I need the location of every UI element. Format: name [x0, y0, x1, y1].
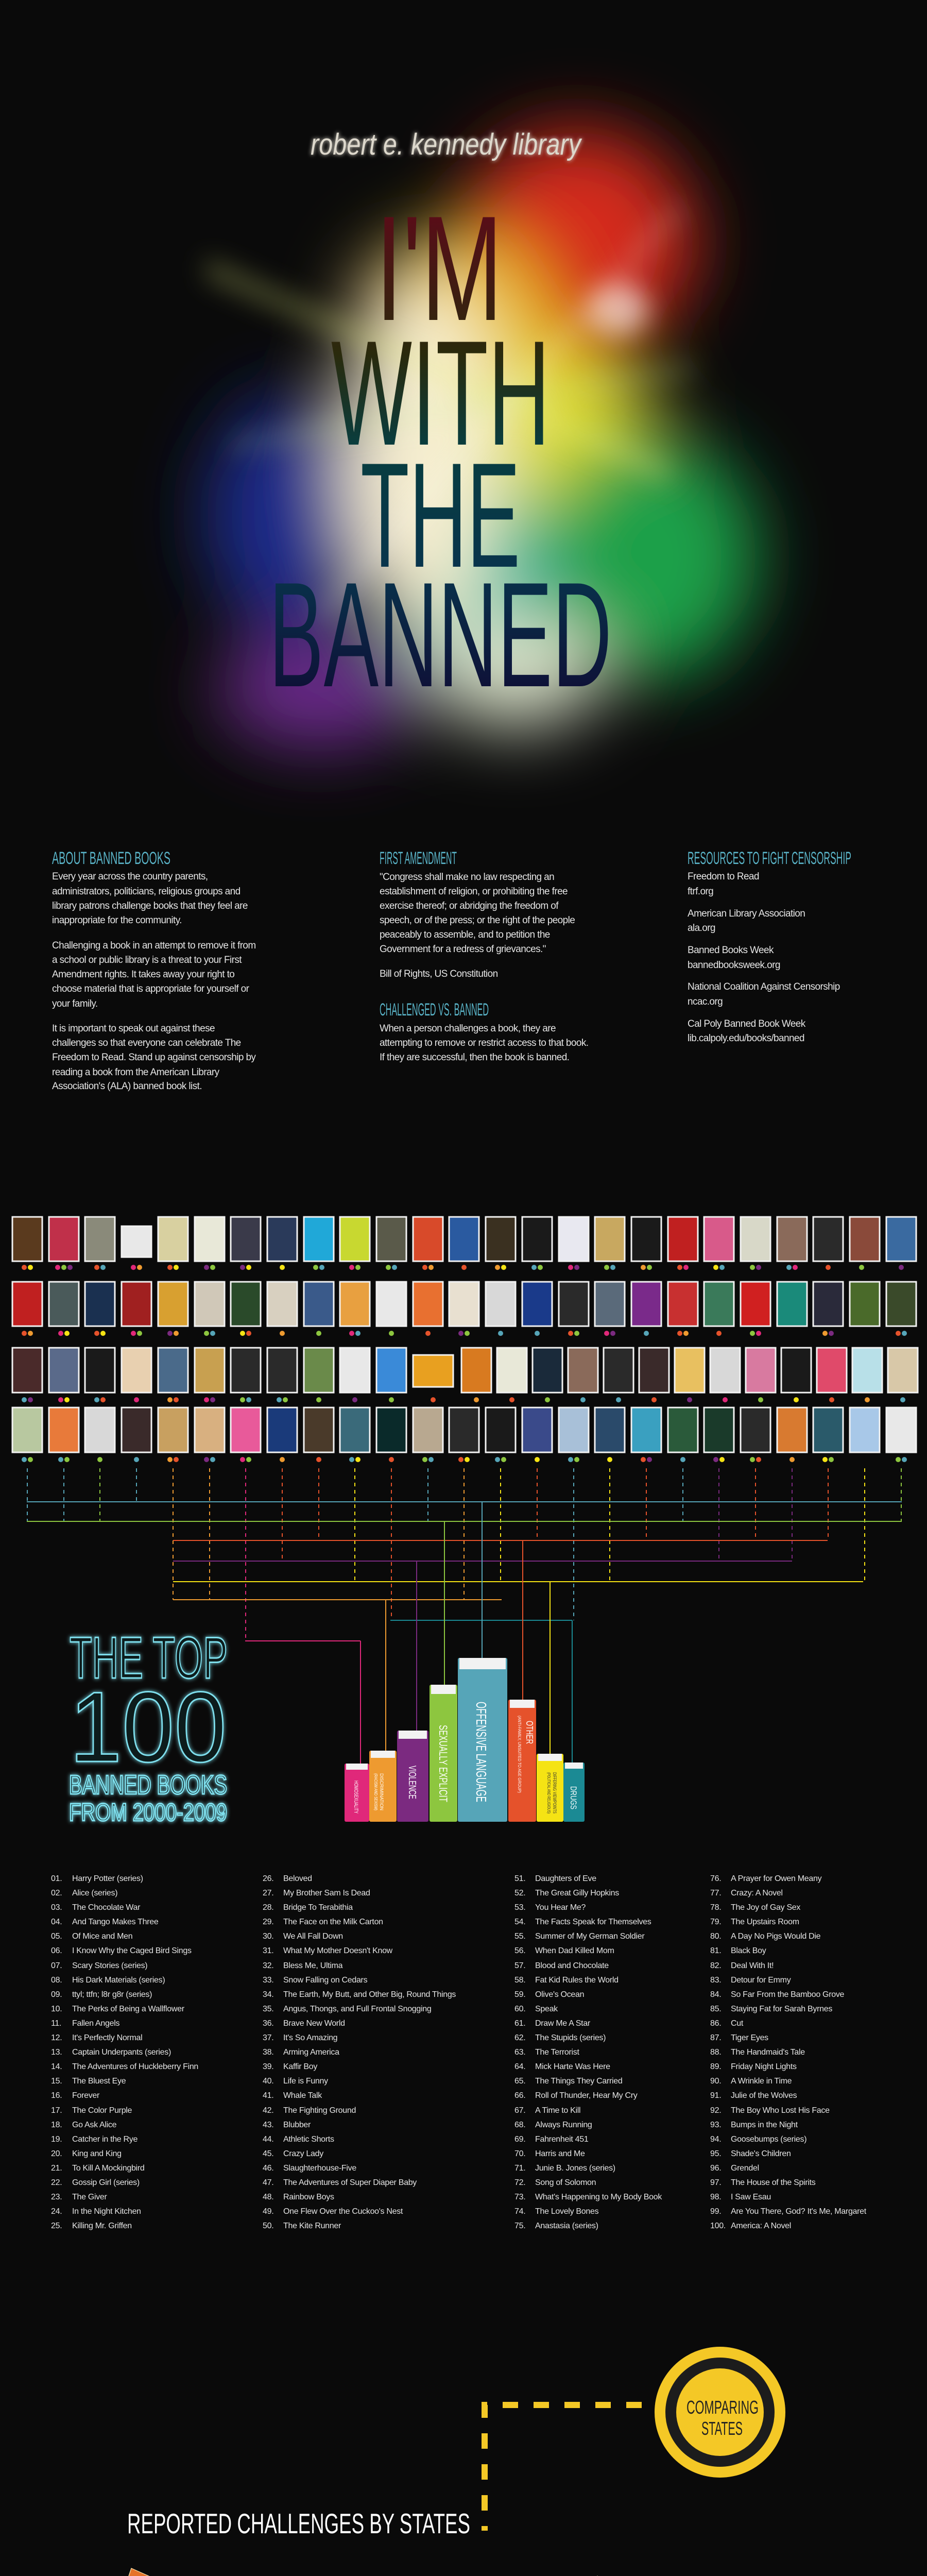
- list: top 100 banned books: 10.: [51, 2005, 62, 2013]
- list: top 100 banned books: The Terrorist: [535, 2048, 579, 2057]
- list: top 100 banned books: Detour for Emmy: [731, 1976, 791, 1985]
- panel: about banned books: your family.: [52, 998, 98, 1009]
- heading: the top 100 banned books from 2000-2009: FROM 2000-2009: [69, 1799, 227, 1826]
- list: top 100 banned books: Crazy: A Novel: [731, 1889, 783, 1897]
- list: top 100 banned books: 60.: [514, 2005, 525, 2013]
- chart: book stack of challenge reasons: DIFFERING VIEWPOINTS: [552, 1772, 557, 1814]
- list: top 100 banned books: 33.: [263, 1976, 273, 1985]
- list: top 100 banned books: The Boy Who Lost His Face: [731, 2106, 830, 2115]
- list: top 100 banned books: Mick Harte Was Here: [535, 2062, 610, 2071]
- list: top 100 banned books: 38.: [263, 2048, 273, 2057]
- list: top 100 banned books: 72.: [514, 2178, 525, 2187]
- panel: resources to fight censorship: [688, 849, 851, 1044]
- list: top 100 banned books: The Handmaid's Tale: [731, 2048, 805, 2057]
- panel: about banned books: challenges so that everyone can celebrate The: [52, 1038, 241, 1048]
- list: top 100 banned books: The Perks of Being a Wallflower: [72, 2005, 185, 2013]
- list: top 100 banned books: 37.: [263, 2033, 273, 2042]
- list: top 100 banned books: Snow Falling on Cedars: [283, 1976, 368, 1985]
- list: top 100 banned books: Shade's Children: [731, 2149, 791, 2158]
- list: top 100 banned books: My Brother Sam Is Dead: [283, 1889, 370, 1897]
- list: top 100 banned books: 67.: [514, 2106, 525, 2115]
- list: top 100 banned books: 61.: [514, 2019, 525, 2028]
- category dots under covers: [22, 1265, 907, 1462]
- list: top 100 banned books: 30.: [263, 1932, 273, 1941]
- chart: book stack of challenge reasons: (POLITICAL AND RELIGIOUS): [546, 1772, 551, 1814]
- list: top 100 banned books: Deal With It!: [731, 1961, 774, 1970]
- header: rainbow glow background: [206, 129, 757, 747]
- list: top 100 banned books: 71.: [514, 2164, 525, 2173]
- list: top 100 banned books: 43.: [263, 2121, 273, 2129]
- panel: first amendment and challenged vs banned: attempting to remove or restrict access to that book.: [380, 1038, 588, 1048]
- chart: book stack of challenge reasons: DISCRIMINATION: [379, 1773, 384, 1810]
- list: top 100 banned books: 14.: [51, 2062, 62, 2071]
- list: top 100 banned books: Bumps in the Night: [731, 2121, 798, 2129]
- panel: first amendment and challenged vs banned: When a person challenges a book, they are: [380, 1023, 556, 1034]
- list: top 100 banned books: 52.: [514, 1889, 525, 1897]
- list: top 100 banned books: 21.: [51, 2164, 62, 2173]
- list: top 100 banned books: Bless Me, Ultima: [283, 1961, 343, 1970]
- list: top 100 banned books: 06.: [51, 1946, 62, 1955]
- list: top 100 banned books: The Lovely Bones: [535, 2207, 599, 2216]
- list: top 100 banned books: His Dark Materials (series): [72, 1976, 165, 1985]
- chart: book stack of challenge reasons: [345, 1658, 585, 1822]
- list: top 100 banned books: Alice (series): [72, 1889, 117, 1897]
- list: top 100 banned books: Are You There, God? It's Me, Margaret: [731, 2207, 867, 2216]
- list: top 100 banned books: I Saw Esau: [731, 2193, 771, 2201]
- panel: about banned books: ABOUT BANNED BOOKS: [52, 849, 170, 868]
- list: top 100 banned books: 86.: [710, 2019, 721, 2028]
- list: top 100 banned books: 25.: [51, 2222, 62, 2230]
- list: top 100 banned books: Blubber: [283, 2121, 311, 2129]
- heading: reported challenges by states: REPORTED CHALLENGES BY STATES: [127, 2507, 470, 2539]
- list: top 100 banned books: Daughters of Eve: [535, 1874, 596, 1883]
- list: top 100 banned books: Tiger Eyes: [731, 2033, 768, 2042]
- list: top 100 banned books: 68.: [514, 2121, 525, 2129]
- list: top 100 banned books: 49.: [263, 2207, 273, 2216]
- list: top 100 banned books: 13.: [51, 2048, 62, 2057]
- list: top 100 banned books: Anastasia (series): [535, 2222, 598, 2230]
- list: top 100 banned books: 57.: [514, 1961, 525, 1970]
- list: top 100 banned books: The Adventures of Super Diaper Baby: [283, 2178, 417, 2187]
- panel: about banned books: library patrons challenge books that they feel are: [52, 901, 248, 911]
- panel: first amendment and challenged vs banned: [380, 849, 588, 1063]
- list: top 100 banned books: 91.: [710, 2091, 721, 2100]
- title: I'M WITH THE BANNED: BANNED: [269, 551, 612, 718]
- chart: book stack of challenge reasons: SEXUALLY EXPLICIT: [437, 1725, 450, 1802]
- panel: about banned books: Amendment rights. It takes away your right to: [52, 969, 234, 980]
- panel: resources to fight censorship: ala.org: [688, 923, 715, 934]
- list: top 100 banned books: A Time to Kill: [535, 2106, 580, 2115]
- panel: first amendment and challenged vs banned: speech, or of the press; or the right of the people: [380, 915, 575, 926]
- list: top 100 banned books: Roll of Thunder, Hear My Cry: [535, 2091, 638, 2100]
- list: top 100 banned books: 99.: [710, 2207, 721, 2216]
- list: top 100 banned books: In the Night Kitchen: [72, 2207, 141, 2216]
- heading: the top 100 banned books from 2000-2009: [69, 1625, 228, 1826]
- list: top 100 banned books: 69.: [514, 2135, 525, 2144]
- panel: about banned books: It is important to speak out against these: [52, 1023, 215, 1034]
- panel: about banned books: administrators, politicians, religious groups and: [52, 886, 241, 897]
- list: top 100 banned books: 63.: [514, 2048, 525, 2057]
- list: top 100 banned books: Go Ask Alice: [72, 2121, 117, 2129]
- list: top 100 banned books: Harry Potter (series): [72, 1874, 143, 1883]
- list: top 100 banned books: Fahrenheit 451: [535, 2135, 589, 2144]
- list: top 100 banned books: 42.: [263, 2106, 273, 2115]
- list: top 100 banned books: The House of the Spirits: [731, 2178, 816, 2187]
- list: top 100 banned books: A Day No Pigs Would Die: [731, 1932, 821, 1941]
- list: top 100 banned books: 85.: [710, 2005, 721, 2013]
- list: top 100 banned books: Scary Stories (series): [72, 1961, 147, 1970]
- list: top 100 banned books: 07.: [51, 1961, 62, 1970]
- list: top 100 banned books: Beloved: [283, 1874, 312, 1883]
- list: top 100 banned books: 50.: [263, 2222, 273, 2230]
- list: top 100 banned books: 03.: [51, 1903, 62, 1912]
- list: top 100 banned books: The Upstairs Room: [731, 1918, 799, 1926]
- panel: resources to fight censorship: American Library Association: [688, 908, 805, 919]
- panel: resources to fight censorship: lib.calpoly.edu/books/banned: [688, 1033, 804, 1044]
- list: top 100 banned books: 47.: [263, 2178, 273, 2187]
- list: top 100 banned books: The Giver: [72, 2193, 108, 2201]
- list: top 100 banned books: Black Boy: [731, 1946, 766, 1955]
- list: top 100 banned books: Harris and Me: [535, 2149, 585, 2158]
- list: top 100 banned books: Summer of My German Soldier: [535, 1932, 645, 1941]
- list: top 100 banned books: Brave New World: [283, 2019, 345, 2028]
- list: top 100 banned books: 83.: [710, 1976, 721, 1985]
- connector lines from books to categories: [27, 1468, 902, 1764]
- panel: first amendment and challenged vs banned: peaceably to assemble, and to petition the: [380, 929, 550, 940]
- list: top 100 banned books: 77.: [710, 1889, 721, 1897]
- list: top 100 banned books: 54.: [514, 1918, 525, 1926]
- list: top 100 banned books: Always Running: [535, 2121, 592, 2129]
- chart: book stack of challenge reasons: (RACISM AND SEXISM): [373, 1773, 378, 1810]
- list: top 100 banned books: 95.: [710, 2149, 721, 2158]
- list: top 100 banned books: 89.: [710, 2062, 721, 2071]
- list: top 100 banned books: America: A Novel: [731, 2222, 791, 2230]
- list: top 100 banned books: 88.: [710, 2048, 721, 2057]
- list: top 100 banned books: 100.: [710, 2222, 726, 2230]
- list: top 100 banned books: 81.: [710, 1946, 721, 1955]
- list: top 100 banned books: 76.: [710, 1874, 721, 1883]
- list: top 100 banned books: 12.: [51, 2033, 62, 2042]
- list: top 100 banned books: Staying Fat for Sarah Byrnes: [731, 2005, 832, 2013]
- list: top 100 banned books: 36.: [263, 2019, 273, 2028]
- list: top 100 banned books: 98.: [710, 2193, 721, 2201]
- chart: book stack of challenge reasons: OTHER: [524, 1721, 535, 1744]
- list: top 100 banned books: 48.: [263, 2193, 273, 2201]
- list: top 100 banned books: 08.: [51, 1976, 62, 1985]
- list: top 100 banned books: 56.: [514, 1946, 525, 1955]
- list: top 100 banned books: 39.: [263, 2062, 273, 2071]
- list: top 100 banned books: 35.: [263, 2005, 273, 2013]
- heading: the top 100 banned books from 2000-2009: BANNED BOOKS: [69, 1770, 227, 1800]
- panel: resources to fight censorship: National Coalition Against Censorship: [688, 981, 840, 992]
- list: top 100 banned books: 64.: [514, 2062, 525, 2071]
- panel: about banned books: a school or public library is a threat to your First: [52, 955, 242, 965]
- panel: resources to fight censorship: Freedom to Read: [688, 871, 759, 882]
- heading: the top 100 banned books from 2000-2009: THE TOP: [70, 1625, 228, 1691]
- panel: about banned books: Freedom to Read. Stand up against censorship by: [52, 1052, 256, 1063]
- list: top 100 banned books: 40.: [263, 2077, 273, 2086]
- list: top 100 banned books: Bridge To Terabithia: [283, 1903, 353, 1912]
- book cover grid: 100 banned books: [12, 1217, 918, 1452]
- list: top 100 banned books: The Color Purple: [72, 2106, 132, 2115]
- list: top 100 banned books: Draw Me A Star: [535, 2019, 591, 2028]
- list: top 100 banned books: 01.: [51, 1874, 62, 1883]
- list: top 100 banned books: Goosebumps (series): [731, 2135, 806, 2144]
- list: top 100 banned books: To Kill A Mockingbird: [72, 2164, 144, 2173]
- list: top 100 banned books: 05.: [51, 1932, 62, 1941]
- list: top 100 banned books: The Facts Speak for Themselves: [535, 1918, 651, 1926]
- list: top 100 banned books: 44.: [263, 2135, 273, 2144]
- list: top 100 banned books: 84.: [710, 1990, 721, 1999]
- list: top 100 banned books: 22.: [51, 2178, 62, 2187]
- list: top 100 banned books: 16.: [51, 2091, 62, 2100]
- panel: first amendment and challenged vs banned: FIRST AMENDMENT: [380, 849, 457, 868]
- panel: about banned books: Challenging a book in an attempt to remove it from: [52, 940, 256, 951]
- panel: about banned books: choose material that is appropriate for yourself or: [52, 984, 250, 994]
- list: top 100 banned books: 31.: [263, 1946, 273, 1955]
- list: top 100 banned books: Kaffir Boy: [283, 2062, 317, 2071]
- list: top 100 banned books: The Adventures of Huckleberry Finn: [72, 2062, 198, 2071]
- panel: first amendment and challenged vs banned: "Congress shall make no law respecting an: [380, 872, 554, 883]
- list: top 100 banned books: Forever: [72, 2091, 100, 2100]
- list: top 100 banned books: 55.: [514, 1932, 525, 1941]
- panel: about banned books: Association's (ALA) banned book list.: [52, 1081, 202, 1092]
- list: top 100 banned books: 29.: [263, 1918, 273, 1926]
- list: top 100 banned books: One Flew Over the Cuckoo's Nest: [283, 2207, 403, 2216]
- list: top 100 banned books: 32.: [263, 1961, 273, 1970]
- list: top 100 banned books: 82.: [710, 1961, 721, 1970]
- list: top 100 banned books: What My Mother Doesn't Know: [283, 1946, 393, 1955]
- list: top 100 banned books: 46.: [263, 2164, 273, 2173]
- map: US states colored by challenges: [72, 2568, 618, 2576]
- list: top 100 banned books: The Great Gilly Hopkins: [535, 1889, 619, 1897]
- list: top 100 banned books: 75.: [514, 2222, 525, 2230]
- panel: first amendment and challenged vs banned: Bill of Rights, US Constitution: [380, 969, 498, 979]
- list: top 100 banned books: Angus, Thongs, and Full Frontal Snogging: [283, 2005, 431, 2013]
- list: top 100 banned books: Captain Underpants (series): [72, 2048, 171, 2057]
- list: top 100 banned books: 41.: [263, 2091, 273, 2100]
- list: top 100 banned books: 97.: [710, 2178, 721, 2187]
- list: top 100 banned books: Friday Night Lights: [731, 2062, 797, 2071]
- title: I'M WITH THE BANNED: [269, 185, 612, 718]
- list: top 100 banned books: 65.: [514, 2077, 525, 2086]
- list: top 100 banned books: Crazy Lady: [283, 2149, 323, 2158]
- chart: book stack of challenge reasons: VIOLENCE: [406, 1766, 418, 1799]
- list: top 100 banned books: 79.: [710, 1918, 721, 1926]
- callout: comparing states badge with dashed connector: STATES: [701, 2418, 743, 2439]
- list: top 100 banned books: The Bluest Eye: [72, 2077, 126, 2086]
- panel: about banned books: inappropriate for the community.: [52, 915, 182, 926]
- list: top 100 banned books: 04.: [51, 1918, 62, 1926]
- list: top 100 banned books: 90.: [710, 2077, 721, 2086]
- list: top 100 banned books: 23.: [51, 2193, 62, 2201]
- list: top 100 banned books: 24.: [51, 2207, 62, 2216]
- list: top 100 banned books: 15.: [51, 2077, 62, 2086]
- list: top 100 banned books: Rainbow Boys: [283, 2193, 334, 2201]
- panel: first amendment and challenged vs banned: establishment of religion, or prohibiting the free: [380, 886, 568, 897]
- header: library script name: robert e. kennedy library: [311, 128, 582, 161]
- list: top 100 banned books: I Know Why the Caged Bird Sings: [72, 1946, 192, 1955]
- panel: first amendment and challenged vs banned: CHALLENGED VS. BANNED: [380, 1000, 489, 1020]
- list: top 100 banned books: 92.: [710, 2106, 721, 2115]
- list: top 100 banned books: 78.: [710, 1903, 721, 1912]
- list: top 100 banned books: 80.: [710, 1932, 721, 1941]
- title: I'M WITH THE BANNED: I'M: [375, 185, 503, 352]
- panel: resources to fight censorship: ftrf.org: [688, 886, 713, 897]
- list: top 100 banned books: Whale Talk: [283, 2091, 322, 2100]
- list: top 100 banned books: When Dad Killed Mom: [535, 1946, 614, 1955]
- list: top 100 banned books: Catcher in the Rye: [72, 2135, 138, 2144]
- list: top 100 banned books: 19.: [51, 2135, 62, 2144]
- list: top 100 banned books: 93.: [710, 2121, 721, 2129]
- list: top 100 banned books: 73.: [514, 2193, 525, 2201]
- list: top 100 banned books: 53.: [514, 1903, 525, 1912]
- panel: first amendment and challenged vs banned: exercise thereof; or abridging the freedom of: [380, 901, 559, 911]
- list: top 100 banned books: Slaughterhouse-Five: [283, 2164, 356, 2173]
- panel: first amendment and challenged vs banned: If they are successful, then the book is banned.: [380, 1052, 569, 1063]
- callout: comparing states badge with dashed connector: COMPARING: [686, 2397, 759, 2418]
- list: top 100 banned books: 28.: [263, 1903, 273, 1912]
- list: top 100 banned books: 20.: [51, 2149, 62, 2158]
- list: top 100 banned books: The Stupids (series): [535, 2033, 606, 2042]
- list: top 100 banned books: The Face on the Milk Carton: [283, 1918, 383, 1926]
- panel: resources to fight censorship: ncac.org: [688, 996, 723, 1007]
- list: top 100 banned books: What's Happening to My Body Book: [535, 2193, 662, 2201]
- chart: book stack of challenge reasons: OFFENSIVE LANGUAGE: [473, 1702, 489, 1802]
- list: top 100 banned books: 74.: [514, 2207, 525, 2216]
- list: top 100 banned books: 26.: [263, 1874, 273, 1883]
- list: top 100 banned books: Olive's Ocean: [535, 1990, 584, 1999]
- list: top 100 banned books: Grendel: [731, 2164, 759, 2173]
- list: top 100 banned books: Gossip Girl (series): [72, 2178, 140, 2187]
- panel: resources to fight censorship: Banned Books Week: [688, 945, 774, 956]
- list: top 100 banned books: 09.: [51, 1990, 62, 1999]
- list: top 100 banned books: And Tango Makes Three: [72, 1918, 159, 1926]
- list: top 100 banned books: 27.: [263, 1889, 273, 1897]
- list: top 100 banned books: Cut: [731, 2019, 744, 2028]
- list: top 100 banned books: 34.: [263, 1990, 273, 1999]
- list: top 100 banned books: The Joy of Gay Sex: [731, 1903, 800, 1912]
- list: top 100 banned books: We All Fall Down: [283, 1932, 343, 1941]
- list: top 100 banned books: Athletic Shorts: [283, 2135, 334, 2144]
- list: top 100 banned books: 59.: [514, 1990, 525, 1999]
- list: top 100 banned books: Fallen Angels: [72, 2019, 119, 2028]
- list: top 100 banned books: The Chocolate War: [72, 1903, 141, 1912]
- heading: the top 100 banned books from 2000-2009: 100: [70, 1671, 227, 1783]
- list: top 100 banned books: 11.: [51, 2019, 61, 2028]
- panel: about banned books: Every year across the country parents,: [52, 871, 208, 882]
- list: top 100 banned books: You Hear Me?: [535, 1903, 586, 1912]
- panel: about banned books: [52, 849, 256, 1092]
- title: I'M WITH THE BANNED: THE: [360, 432, 520, 599]
- list: top 100 banned books: The Kite Runner: [283, 2222, 341, 2230]
- list: top 100 banned books: It's Perfectly Normal: [72, 2033, 142, 2042]
- list: top 100 banned books: The Fighting Ground: [283, 2106, 356, 2115]
- list: top 100 banned books: The Things They Carried: [535, 2077, 622, 2086]
- chart: book stack of challenge reasons: DRUGS: [569, 1786, 578, 1809]
- list: top 100 banned books: 87.: [710, 2033, 721, 2042]
- callout: comparing states badge with dashed connector: [485, 2347, 785, 2531]
- list: top 100 banned books: A Prayer for Owen Meany: [731, 1874, 822, 1883]
- list: top 100 banned books: 96.: [710, 2164, 721, 2173]
- list: top 100 banned books: Life is Funny: [283, 2077, 328, 2086]
- list: top 100 banned books: ttyl; ttfn; l8r g8r (series): [72, 1990, 152, 1999]
- list: top 100 banned books: Song of Solomon: [535, 2178, 596, 2187]
- list: top 100 banned books: Arming America: [283, 2048, 339, 2057]
- list: top 100 banned books: Speak: [535, 2005, 558, 2013]
- list: top 100 banned books: Julie of the Wolves: [731, 2091, 797, 2100]
- list: top 100 banned books: [51, 1874, 867, 2230]
- list: top 100 banned books: So Far From the Bamboo Grove: [731, 1990, 845, 1999]
- panel: first amendment and challenged vs banned: Government for a redress of grievances.": [380, 944, 546, 955]
- list: top 100 banned books: 45.: [263, 2149, 273, 2158]
- list: top 100 banned books: 62.: [514, 2033, 525, 2042]
- list: top 100 banned books: 51.: [514, 1874, 525, 1883]
- list: top 100 banned books: It's So Amazing: [283, 2033, 337, 2042]
- title: I'M WITH THE BANNED: WITH: [331, 310, 550, 477]
- list: top 100 banned books: Blood and Chocolate: [535, 1961, 609, 1970]
- list: top 100 banned books: Of Mice and Men: [72, 1932, 132, 1941]
- list: top 100 banned books: 58.: [514, 1976, 525, 1985]
- panel: about banned books: reading a book from the American Library: [52, 1067, 220, 1078]
- panel: resources to fight censorship: bannedbooksweek.org: [688, 960, 780, 971]
- panel: resources to fight censorship: Cal Poly Banned Book Week: [688, 1019, 806, 1029]
- list: top 100 banned books: A Wrinkle in Time: [731, 2077, 792, 2086]
- list: top 100 banned books: King and King: [72, 2149, 122, 2158]
- list: top 100 banned books: Junie B. Jones (series): [535, 2164, 615, 2173]
- list: top 100 banned books: 94.: [710, 2135, 721, 2144]
- list: top 100 banned books: The Earth, My Butt, and Other Big, Round Things: [283, 1990, 456, 1999]
- list: top 100 banned books: Killing Mr. Griffen: [72, 2222, 132, 2230]
- chart: book stack of challenge reasons: HOMOSEXUALITY: [353, 1781, 359, 1814]
- list: top 100 banned books: 70.: [514, 2149, 525, 2158]
- list: top 100 banned books: 18.: [51, 2121, 62, 2129]
- list: top 100 banned books: 02.: [51, 1889, 62, 1897]
- chart: book stack of challenge reasons: (ANTI-FAMILY, UNSUITED TO AGE GROUP): [517, 1716, 522, 1793]
- list: top 100 banned books: 17.: [51, 2106, 62, 2115]
- list: top 100 banned books: Fat Kid Rules the World: [535, 1976, 619, 1985]
- list: top 100 banned books: 66.: [514, 2091, 525, 2100]
